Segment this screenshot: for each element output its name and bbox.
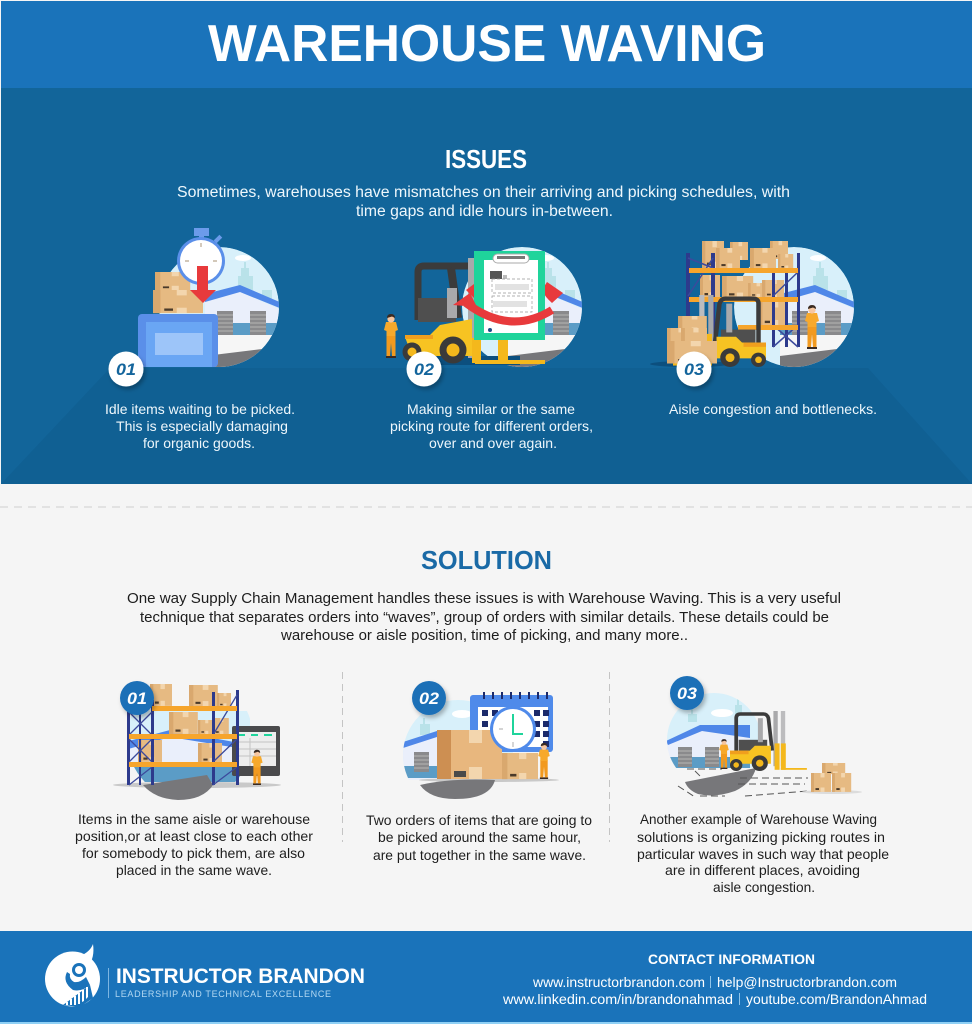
contact information: www.linkedin.com/in/brandonahmad (502, 991, 733, 1007)
badge 02 (412, 681, 446, 715)
caption 02: Two orders of items that are going to (366, 812, 592, 828)
badge 01 (108, 352, 144, 386)
panel: issues (1, 88, 972, 484)
caption 02: picking route for different orders, (390, 418, 593, 434)
badge 03 (670, 676, 704, 710)
panel: solution (75, 545, 889, 895)
contact information (502, 952, 927, 1007)
illustration: idle items under a stopwatch (138, 228, 282, 370)
badge 01 (120, 681, 154, 715)
contact information: CONTACT INFORMATION (648, 952, 815, 967)
illustration: items in the same aisle on a rack (113, 684, 281, 800)
caption 03: Aisle congestion and bottlenecks. (669, 401, 877, 417)
solution intro text: One way Supply Chain Management handles these issues is with Warehouse Waving. This is a very useful (127, 591, 841, 607)
contact information: help@Instructorbrandon.com (717, 974, 897, 990)
caption 02: Making similar or the same (407, 401, 575, 417)
badge 03: 03 (677, 684, 698, 703)
caption 01 (75, 811, 313, 878)
caption 01: for organic goods. (143, 435, 255, 451)
caption 02 (390, 401, 593, 451)
caption 01: for somebody to pick them, are also (82, 845, 305, 861)
title: WAREHOUSE WAVING (208, 15, 766, 73)
caption 01: Idle items waiting to be picked. (105, 401, 295, 417)
solution heading: SOLUTION (421, 545, 552, 575)
solution intro text (127, 591, 841, 644)
caption 01: This is especially damaging (116, 418, 288, 434)
illustration: forklift on separated picking routes (660, 690, 862, 797)
issues intro text: Sometimes, warehouses have mismatches on their arriving and picking schedules, with (177, 184, 790, 201)
brand name and tagline: INSTRUCTOR BRANDON (116, 965, 365, 988)
caption 01: Items in the same aisle or warehouse (78, 811, 310, 827)
header band with title (1, 1, 972, 88)
logo mark (45, 944, 100, 1007)
solution intro text: technique that separates orders into “waves”, group of orders with similar details. These details could be (140, 610, 829, 626)
badge 01: 01 (116, 360, 136, 379)
solution intro text: warehouse or aisle position, time of picking, and many more.. (280, 628, 688, 644)
badge 03: 03 (684, 360, 705, 379)
badge 02: 02 (419, 689, 440, 708)
caption 03: are in different places, avoiding (665, 862, 860, 878)
issues intro text: time gaps and idle hours in-between. (356, 203, 613, 220)
caption 01: placed in the same wave. (116, 862, 272, 878)
caption 02: over and over again. (429, 435, 557, 451)
caption 02 (366, 812, 592, 863)
badge 02 (406, 352, 442, 386)
caption 03: Another example of Warehouse Waving (640, 811, 877, 827)
brand name and tagline (108, 965, 365, 999)
caption 03: solutions is organizing picking routes in (637, 829, 885, 845)
caption 01: position,or at least close to each other (75, 828, 313, 844)
illustration: forklift and clipboard with repeating route (384, 247, 585, 370)
caption 03 (637, 811, 889, 895)
caption 01 (105, 401, 295, 451)
brand name and tagline: LEADERSHIP AND TECHNICAL EXCELLENCE (115, 989, 331, 999)
badge 03 (676, 352, 712, 386)
badge 01: 01 (127, 689, 147, 708)
issues intro text (177, 184, 790, 220)
badge 02: 02 (414, 360, 435, 379)
caption 03: particular waves in such way that people (637, 846, 889, 862)
contact information: youtube.com/BrandonAhmad (746, 991, 927, 1007)
illustration: boxes with calendar and clock (400, 692, 559, 799)
illustration: congested aisle with rack and forklift (650, 241, 857, 370)
caption 02: are put together in the same wave. (373, 847, 586, 863)
issues heading: ISSUES (445, 144, 527, 174)
caption 03: aisle congestion. (713, 879, 815, 895)
caption 02: be picked around the same hour, (378, 829, 581, 845)
footer band (0, 931, 972, 1024)
contact information: www.instructorbrandon.com (532, 974, 705, 990)
